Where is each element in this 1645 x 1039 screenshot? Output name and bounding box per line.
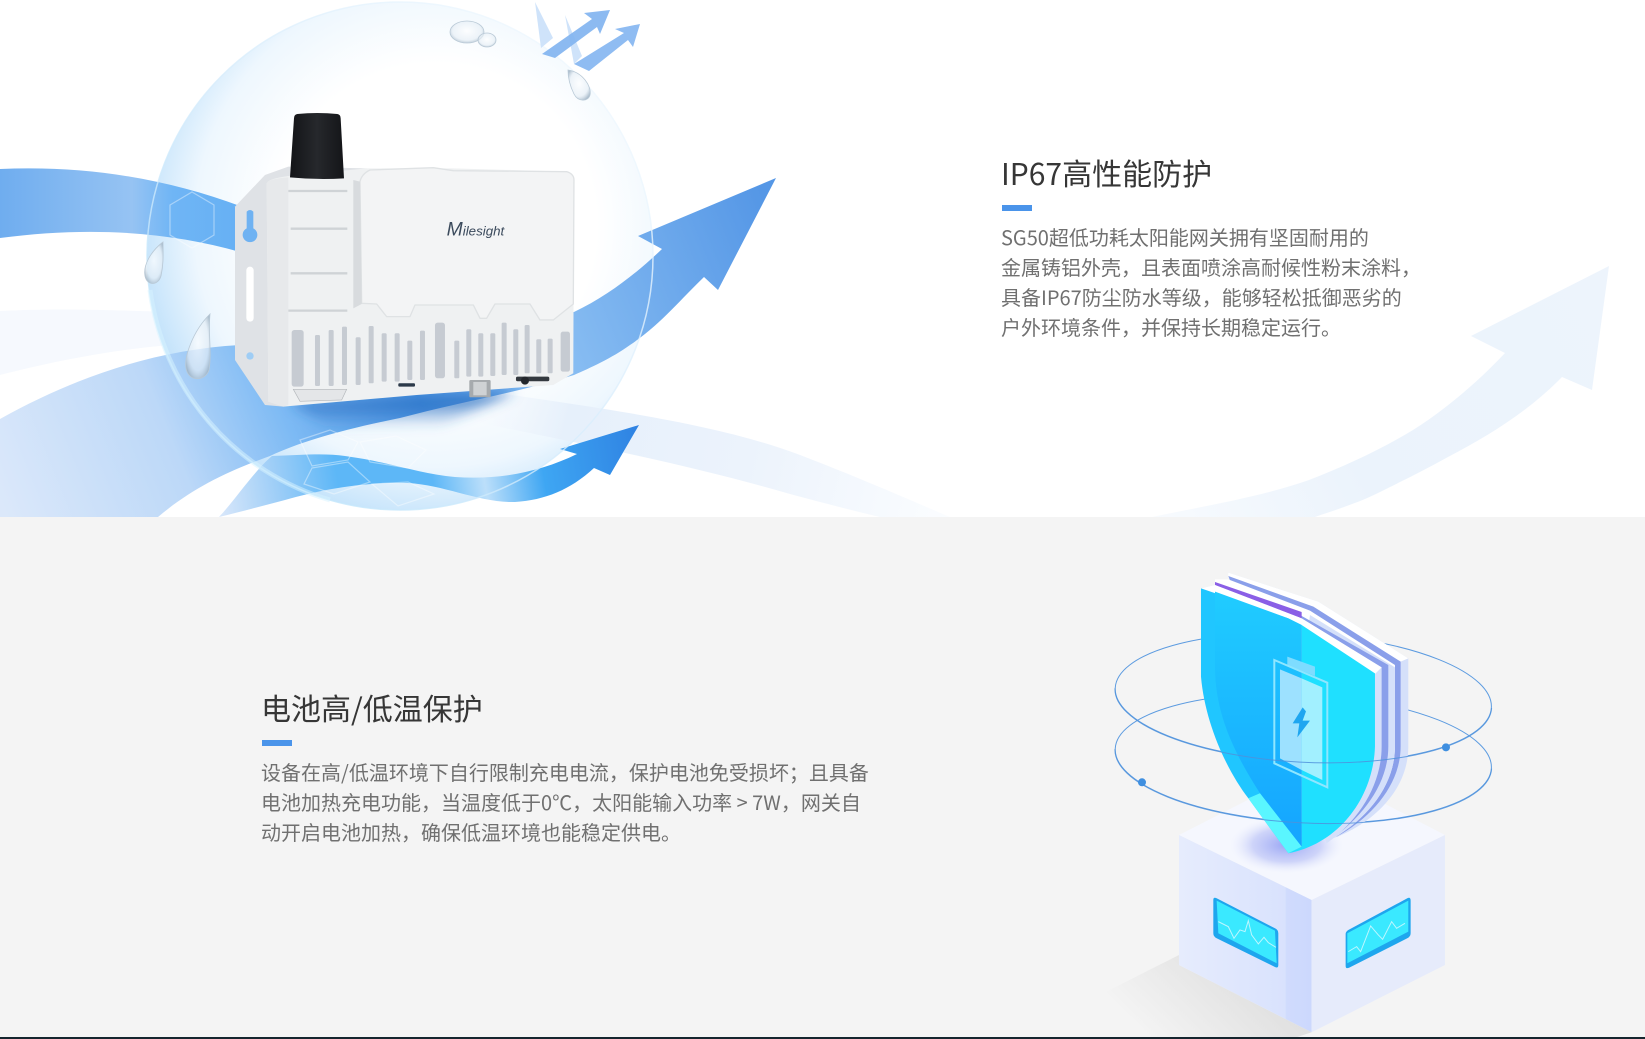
keyhole — [243, 210, 257, 242]
heading: IP67高性能防护 — [1001, 150, 1212, 194]
arrow: large blue arrow — [0, 178, 776, 517]
bubble: protective sphere — [147, 2, 653, 510]
ribbon: upper left band — [0, 168, 240, 252]
text block: IP67 — [1001, 150, 1421, 341]
icon: upward arrows top right — [535, 2, 640, 71]
cube base — [1179, 767, 1445, 1032]
accent bar — [1002, 205, 1032, 211]
body text: 动开启电池加热，确保低温环境也能稳定供电。 — [261, 817, 681, 846]
body text: SG50超低功耗太阳能网关拥有坚固耐用的 — [1001, 222, 1369, 251]
body text — [1001, 222, 1421, 341]
panel: IP67 protection — [0, 0, 1645, 517]
antenna — [290, 113, 344, 179]
arrow: faint background arrow — [1152, 266, 1609, 517]
accent bar — [262, 740, 292, 746]
body text: 具备IP67防尘防水等级，能够轻松抵御恶劣的 — [1001, 282, 1402, 311]
bubble rim and hexagon overlay — [147, 2, 653, 510]
illustration: shield on cube — [1114, 573, 1492, 1037]
cooling fins — [292, 323, 570, 387]
body text: 金属铸铝外壳，且表面喷涂高耐候性粉末涂料， — [1001, 252, 1421, 281]
back layers — [1228, 573, 1408, 838]
gateway body — [267, 168, 574, 407]
shield — [1201, 573, 1408, 853]
orbit rings front — [1115, 688, 1492, 824]
icon: water droplets — [145, 21, 590, 379]
floor shadow — [1097, 955, 1312, 1038]
body text: 设备在高/低温环境下自行限制充电电流，保护电池免受损坏；且具备 — [261, 757, 869, 786]
ribbon: pale band to lower right — [440, 385, 950, 517]
shield front right — [1288, 625, 1375, 853]
hexagon pattern — [170, 192, 434, 506]
shield front left — [1201, 588, 1302, 853]
body text: 户外环境条件，并保持长期稳定运行。 — [1001, 312, 1341, 341]
screen right — [1346, 898, 1411, 968]
glow under shield — [1230, 817, 1343, 873]
shadow under gateway — [290, 392, 515, 428]
mounting bracket — [235, 167, 367, 407]
bottom border line — [0, 1037, 1645, 1039]
screen left — [1213, 898, 1278, 967]
bottom connectors — [293, 377, 549, 401]
body text — [261, 757, 869, 846]
ridges — [288, 191, 347, 311]
arrow: small lower arrow — [219, 425, 639, 517]
orbit rings back — [1112, 624, 1495, 832]
illustration: gateway in protective bubble — [0, 1, 1609, 517]
icon: battery with bolt — [1274, 657, 1327, 787]
panel: battery temperature protection — [0, 517, 1645, 1037]
heading: 电池高/低温保护 — [261, 685, 483, 729]
ribbon: pale left band — [0, 309, 170, 375]
text block: battery protection — [261, 685, 869, 846]
device: SG50 gateway — [235, 113, 574, 407]
body text: 电池加热充电功能，当温度低于0℃，太阳能输入功率 > 7W，网关自 — [261, 787, 861, 816]
orbit dots — [1138, 743, 1450, 786]
front cover plate — [360, 168, 574, 320]
logo: Milesight — [447, 219, 506, 240]
